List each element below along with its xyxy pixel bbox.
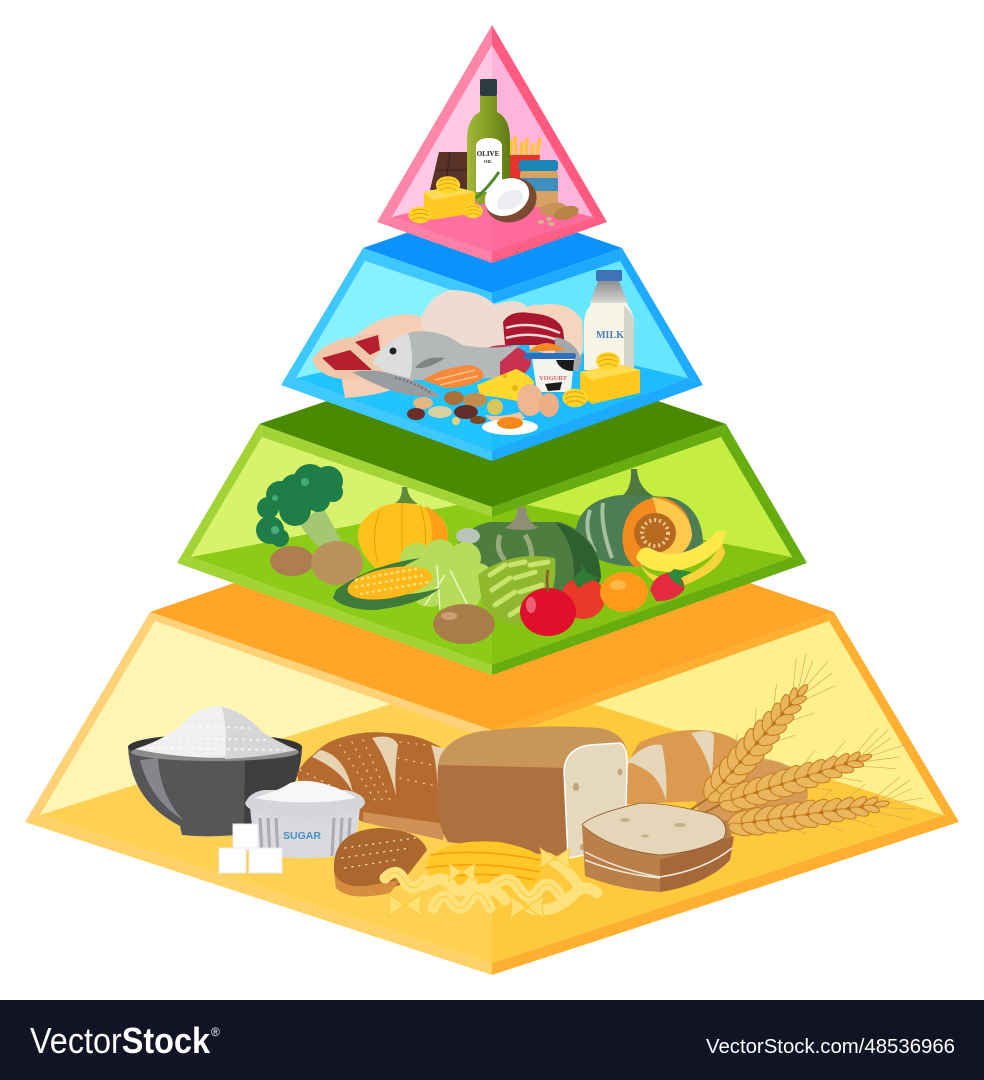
olive oil bottle	[467, 79, 510, 205]
sugar cubes	[219, 824, 282, 873]
peanuts	[538, 201, 580, 226]
peanut butter jar	[519, 160, 558, 207]
milk bottle	[584, 270, 634, 370]
steak	[312, 333, 385, 380]
footer bar	[0, 1000, 984, 1080]
olive oil bottle: OLIVE	[477, 150, 500, 158]
cheese	[477, 369, 534, 404]
left seeded bread	[297, 732, 446, 840]
bowl of flour	[128, 706, 302, 836]
artichoke	[478, 556, 555, 626]
bread loaf	[437, 727, 627, 858]
lettuce	[400, 539, 493, 614]
sugar bowl: SUGAR	[283, 830, 321, 842]
broccoli	[256, 464, 344, 552]
seeded bun	[334, 828, 427, 897]
bacon	[503, 312, 565, 345]
potato front	[433, 604, 495, 644]
sugar bowl	[245, 781, 365, 858]
nuts	[407, 391, 503, 425]
large fish	[372, 331, 520, 380]
olive oil bottle: OIL	[484, 159, 492, 164]
eggs	[482, 384, 559, 435]
tier 3: protein and dairy	[281, 203, 703, 461]
banana	[636, 530, 727, 586]
footer logo: VectorStock	[30, 1020, 211, 1061]
small fish	[352, 371, 441, 397]
red meat	[475, 345, 531, 379]
tier 2: vegetables and fruit	[177, 345, 807, 675]
tier 4: fats and oils	[377, 25, 607, 263]
coconut	[479, 170, 543, 230]
wheat stalks and round bread	[625, 644, 926, 848]
big green pumpkin	[447, 507, 601, 600]
footer url: VectorStock.com/48536966	[706, 1036, 955, 1058]
orange	[600, 572, 648, 612]
yogurt cup	[524, 337, 582, 392]
chocolate	[430, 152, 467, 190]
pasta	[385, 841, 597, 918]
cut green pumpkin	[575, 469, 703, 567]
bread slices	[582, 803, 734, 892]
tomato	[561, 560, 605, 619]
corn	[333, 558, 440, 610]
butter and curls	[408, 176, 483, 223]
potatoes	[270, 541, 363, 585]
yogurt cup: YOGURT	[539, 375, 568, 382]
tier 1: grains base	[25, 494, 959, 975]
fries	[510, 136, 540, 180]
apple	[520, 570, 576, 636]
blue tier shell	[281, 203, 703, 461]
pink tier shell	[377, 25, 607, 263]
butter block	[562, 352, 640, 407]
chicken pieces	[340, 290, 583, 398]
orange tier shell	[25, 494, 959, 975]
salmon	[423, 365, 483, 388]
green tier shell	[177, 345, 807, 675]
yellow pumpkin	[358, 487, 448, 568]
strawberry	[650, 569, 692, 601]
registered mark: ®	[211, 1025, 220, 1039]
milk bottle: MILK	[596, 330, 624, 341]
